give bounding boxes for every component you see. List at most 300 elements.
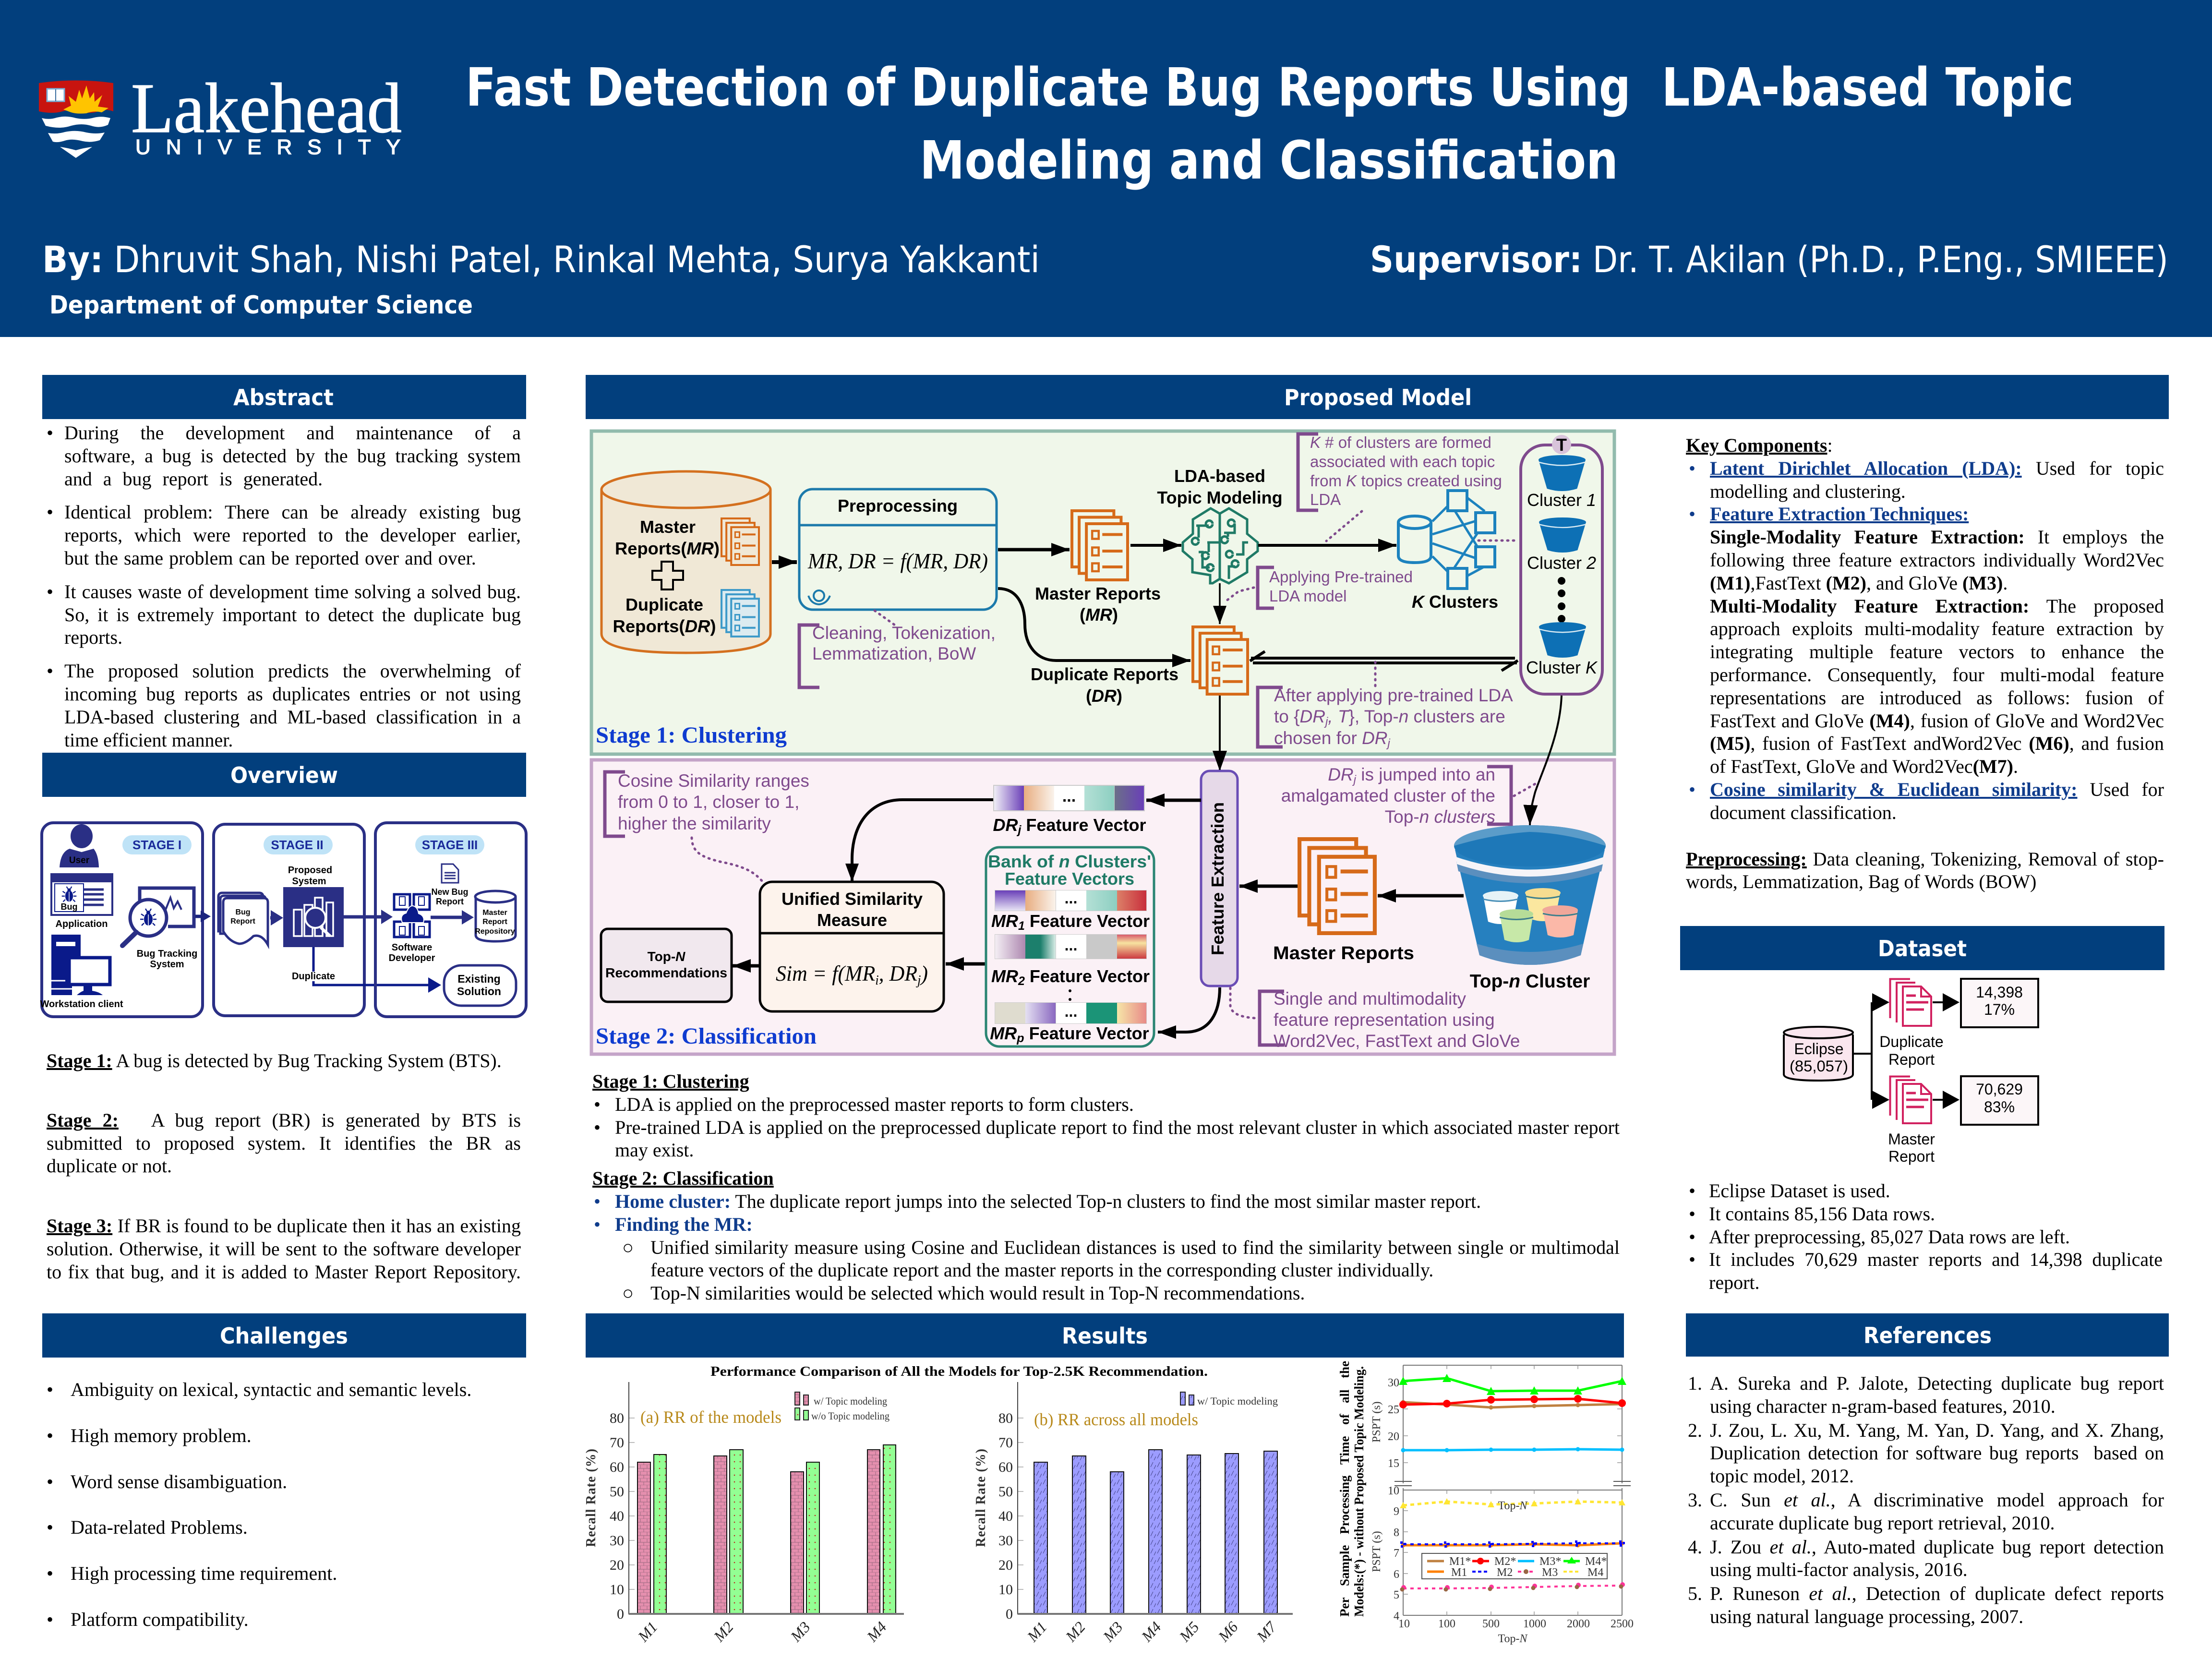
- panel: stage III: STAGE III: [422, 838, 478, 852]
- text: overview stages: duplicate or not.: [47, 1155, 172, 1177]
- existing solution: [444, 965, 516, 1006]
- callout: cosine similarity: [605, 771, 809, 882]
- heading: Overview: [42, 753, 526, 797]
- panel: stage I: Application: [56, 919, 108, 929]
- label: duplicate reports: (DR): [1086, 686, 1122, 706]
- panel: stage III: Report: [436, 897, 464, 906]
- text: abstract: During the development and maintenance of a: [64, 422, 521, 444]
- bar chart: RR across all models: (b) RR across all models: [1034, 1410, 1198, 1429]
- text: challenges list: Data-related Problems.: [71, 1516, 248, 1538]
- line chart: PSPT: 6: [1394, 1568, 1399, 1581]
- bar chart: RR of the models: 0: [617, 1606, 624, 1622]
- text: abstract: incoming bug reports as duplicates entries or not using: [64, 683, 521, 705]
- text: key components: Latent Dirichlet Allocation (LDA): Used for topic: [1710, 457, 2164, 479]
- box: duplicate count: 14,398: [1976, 984, 2023, 1001]
- text: stage descriptions: ○: [622, 1237, 634, 1258]
- text: abstract: The proposed solution predicts the overwhelming of: [64, 660, 521, 682]
- logo: Lakehead University: Lakehead: [131, 69, 402, 148]
- unified similarity measure box: ): [920, 961, 928, 986]
- text: references: 5.: [1688, 1583, 1702, 1604]
- panel: stage II: STAGE II: [271, 838, 324, 852]
- chart caption: per sample processing time: of: [1337, 1413, 1352, 1425]
- bank of cluster feature vectors: Feature Vectors: [1005, 869, 1134, 889]
- top-N recommendations: Top-N: [648, 949, 685, 964]
- label: duplicate report: [1879, 1033, 1944, 1068]
- heading: Challenges: Challenges: [220, 1323, 348, 1349]
- line chart: PSPT: [1370, 1365, 1634, 1645]
- label: master report: Report: [1888, 1148, 1935, 1165]
- icon: application window: [51, 874, 112, 915]
- callout: pre-trained LDA: LDA model: [1269, 587, 1346, 605]
- text: overview stages: submitted to proposed system. It identifies the BR as: [47, 1132, 521, 1154]
- heading: Results: [586, 1313, 1624, 1358]
- bank of clusters: Cluster K: [1526, 658, 1598, 677]
- bank of clusters: Cluster 1: [1527, 490, 1596, 510]
- callout: pre-trained LDA: [1226, 567, 1413, 608]
- text: stage descriptions: feature vectors of the duplicate report and the master reports in the corresponding cluster individually.: [650, 1259, 1433, 1281]
- feature vector: DRj: j: [1016, 823, 1022, 837]
- icon: user: [60, 824, 99, 867]
- text: key components: of FastText, GloVe and Word2Vec(M7).: [1710, 756, 2018, 777]
- heading: Proposed Model: [586, 375, 2169, 419]
- bank of cluster feature vectors: ...: [1065, 890, 1077, 907]
- panel: stage II: Report: [230, 917, 255, 926]
- label: master report: Master: [1888, 1130, 1935, 1148]
- existing solution: Solution: [457, 985, 501, 998]
- text: references: using natural language processing, 2007.: [1710, 1606, 2023, 1627]
- icon: proposed system: [283, 887, 344, 947]
- bar chart: RR across all models: M4: [1138, 1618, 1165, 1645]
- text: challenges list: •: [47, 1425, 53, 1446]
- text: abstract: •: [47, 422, 53, 444]
- panel: stage III: Developer: [389, 953, 435, 963]
- bank of clusters: T: [1556, 435, 1567, 455]
- callout: top-n clusters chosen: }, Top-n clusters are: [1348, 707, 1505, 726]
- callout: K clusters: K # of clusters are formed: [1310, 433, 1491, 451]
- label: duplicate report: Report: [1888, 1051, 1935, 1068]
- line chart: PSPT: 7: [1394, 1547, 1399, 1560]
- database: master and duplicate reports: Reports(MR): [615, 539, 720, 558]
- database: master and duplicate reports: [601, 471, 770, 653]
- line chart: PSPT: Top-N: [1498, 1500, 1528, 1512]
- callout: top-n clusters chosen: j: [1386, 737, 1391, 750]
- bank of clusters: Cluster 2: [1527, 553, 1596, 573]
- callout: K clusters: [1298, 433, 1502, 541]
- callout: feature representation: feature representation using: [1274, 1010, 1495, 1030]
- callout: feature representation: Word2Vec, FastText and GloVe: [1274, 1031, 1520, 1051]
- callout: DRj jumped: [1281, 765, 1535, 827]
- heading: Abstract: [42, 375, 526, 419]
- legend: [795, 1392, 890, 1422]
- dataset diagram: [1784, 979, 2038, 1165]
- text: references: J. Zou, L. Xu, M. Yang, M. Yan, D. Yang, and X. Zhang,: [1710, 1419, 2164, 1441]
- text: stage descriptions: Finding the MR:: [615, 1214, 753, 1235]
- existing solution: Existing: [457, 973, 501, 985]
- label: master reports: (MR): [1080, 605, 1118, 625]
- callout: feature representation: [1230, 988, 1520, 1051]
- label: stage 1: Stage 1: Clustering: [596, 722, 787, 748]
- heading: Dataset: Dataset: [1878, 936, 1967, 962]
- bar chart: RR across all models: 30: [998, 1533, 1013, 1549]
- panel: stage I: System: [150, 959, 184, 970]
- callout: cosine similarity: from 0 to 1, closer to 1,: [618, 792, 799, 812]
- top-N recommendations: Recommendations: [605, 965, 727, 980]
- text: challenges list: Ambiguity on lexical, syntactic and semantic levels.: [71, 1379, 471, 1400]
- department: Department of Computer Science: [49, 291, 473, 320]
- text: stage descriptions: LDA is applied on the preprocessed master reports to form clusters.: [615, 1094, 1134, 1115]
- unified similarity measure box: , DR: [879, 961, 917, 986]
- bank of cluster feature vectors: 1: [1018, 919, 1025, 933]
- bank of cluster feature vectors: MR: [990, 1023, 1017, 1043]
- chart caption: per sample processing time: [1337, 1361, 1366, 1617]
- panel: stage II: Duplicate: [292, 971, 335, 982]
- line chart: PSPT: 2500: [1611, 1618, 1634, 1630]
- panel: stage I: [40, 823, 211, 1017]
- text: abstract: It causes waste of development time solving a solved bug.: [64, 581, 521, 602]
- text: overview stages: [47, 1050, 521, 1283]
- callout: feature representation: Single and multimodality: [1274, 989, 1467, 1009]
- text: dataset facts: report.: [1709, 1272, 1760, 1293]
- line chart: PSPT: 100: [1438, 1618, 1455, 1630]
- label: duplicate report: Duplicate: [1879, 1033, 1944, 1050]
- text: challenges list: Platform compatibility.: [71, 1609, 249, 1630]
- label: duplicate reports: [1031, 664, 1178, 706]
- text: key components: representations are introduced as follows: fusion of: [1710, 687, 2164, 709]
- bank of cluster feature vectors: Bank of n Clusters': [988, 852, 1151, 871]
- text: dataset facts: Eclipse Dataset is used.: [1709, 1180, 1890, 1202]
- bar chart: RR of the models: M4: [863, 1618, 890, 1645]
- text: stage descriptions: Stage 1: Clustering: [592, 1070, 749, 1092]
- database: eclipse: (85,057): [1790, 1058, 1848, 1075]
- panel: stage II: [214, 824, 430, 1016]
- text: challenges list: High memory problem.: [71, 1425, 252, 1446]
- callout: top-n clusters chosen: After applying pre-trained LDA: [1274, 685, 1513, 705]
- unified similarity measure box: [760, 882, 944, 1011]
- text: key components: Multi-Modality Feature Extraction: The proposed: [1710, 595, 2164, 617]
- bank of cluster feature vectors: 2: [1018, 974, 1025, 988]
- panel: stage I: STAGE I: [132, 838, 181, 852]
- header band: [0, 0, 2212, 337]
- bar chart: RR across all models: M1: [1023, 1618, 1050, 1645]
- callout: DRj jumped: Top-n clusters: [1385, 807, 1495, 827]
- text: references: using multi-factor analysis, 2016.: [1710, 1559, 1968, 1580]
- bar chart: RR of the models: 40: [610, 1508, 624, 1524]
- heading: References: References: [1863, 1322, 1992, 1348]
- text: overview stages: solution. Otherwise, it will be sent to the software developer: [47, 1238, 521, 1260]
- text: stage descriptions: Unified similarity measure using Cosine and Euclidean distances is used to find the similarity between single or multimodal: [650, 1237, 1620, 1258]
- line chart: PSPT: PSPT (s): [1370, 1401, 1383, 1443]
- panel: stage II: System: [292, 876, 326, 887]
- text: challenges list: [47, 1379, 471, 1630]
- legend: [1180, 1392, 1278, 1407]
- text: stage descriptions: Pre-trained LDA is applied on the preprocessed duplicate report to find the most relevant cluster in which associated master report: [615, 1117, 1620, 1138]
- legend: w/o Topic modeling: [811, 1410, 890, 1422]
- icon: master report repository: Master: [482, 909, 507, 917]
- icon: duplicate reports stack: [1193, 627, 1248, 694]
- box: duplicate count: 17%: [1984, 1001, 2015, 1018]
- text: key components: Preprocessing: Data cleaning, Tokenizing, Removal of stop-: [1686, 848, 2164, 870]
- text: references: P. Runeson et al., Detection of duplicate defect reports: [1710, 1583, 2164, 1604]
- text: abstract: •: [47, 581, 53, 602]
- line chart: PSPT: 25: [1388, 1404, 1399, 1416]
- bar chart: RR of the models: 60: [610, 1459, 624, 1475]
- callout: K clusters: associated with each topic: [1310, 453, 1495, 470]
- callout: top-n clusters chosen: , T: [1328, 707, 1350, 726]
- icon: master reports: [1072, 511, 1128, 580]
- label: LDA topic modeling: [1157, 466, 1283, 507]
- text: stage descriptions: may exist.: [615, 1139, 694, 1161]
- bar chart: RR across all models: M3: [1099, 1618, 1126, 1645]
- line chart: PSPT: PSPT (s): [1370, 1531, 1383, 1572]
- icon: master reports large: [1299, 839, 1375, 933]
- text: references: topic model, 2012.: [1710, 1465, 1854, 1487]
- box: duplicate count: [1961, 979, 2038, 1027]
- callout: top-n clusters chosen: chosen for DR: [1274, 728, 1388, 748]
- callout: pre-trained LDA: Applying Pre-trained: [1269, 568, 1413, 586]
- unified similarity measure box: Measure: [817, 910, 887, 930]
- text: challenges list: Word sense disambiguation.: [71, 1471, 287, 1492]
- bar chart: RR across all models: 0: [1006, 1606, 1013, 1622]
- text: abstract: reports, which were reported to the developer earlier,: [64, 524, 521, 546]
- heading: Abstract: Abstract: [233, 385, 334, 410]
- text: key components: (M1),FastText (M2), and GloVe (M3).: [1710, 572, 2008, 594]
- top-N recommendations: [601, 929, 732, 1002]
- chart caption: per sample processing time: the: [1337, 1361, 1352, 1378]
- legend: M3: [1542, 1566, 1558, 1579]
- line chart: PSPT: 30: [1388, 1377, 1399, 1389]
- text: key components: integrating multiple feature vectors to enhance the: [1710, 641, 2164, 662]
- unified similarity measure box: j: [916, 973, 921, 988]
- callout: DRj jumped: is jumped into an: [1356, 765, 1495, 784]
- text: references: C. Sun et al., A discriminative model approach for: [1710, 1489, 2164, 1511]
- bank of cluster feature vectors: ...: [1065, 1003, 1077, 1020]
- heading: References: [1686, 1313, 2169, 1357]
- bar chart: RR across all models: 50: [998, 1484, 1013, 1500]
- database: eclipse: [1784, 1027, 1853, 1081]
- text: dataset facts: It includes 70,629 master reports and 14,398 duplicate: [1709, 1249, 2163, 1270]
- text: stage descriptions: •: [594, 1094, 601, 1115]
- legend: M3*: [1539, 1555, 1561, 1568]
- panel: stage I: Bug Tracking: [137, 949, 197, 959]
- text: key components: modelling and clustering.: [1710, 481, 1906, 502]
- preprocessing box: Preprocessing: [838, 496, 958, 516]
- line chart: PSPT: 20: [1388, 1431, 1399, 1443]
- box: master count: [1961, 1076, 2038, 1125]
- line chart: PSPT: 1000: [1523, 1618, 1546, 1630]
- line chart: PSPT: 5: [1394, 1589, 1399, 1601]
- text: key components: FastText and GloVe (M4), fusion of GloVe and Word2Vec: [1710, 710, 2164, 732]
- legend: w/ Topic modeling: [1197, 1395, 1278, 1407]
- feature extraction bar: [1201, 771, 1238, 986]
- preprocessing box: MR, DR = f(MR, DR): [807, 549, 988, 573]
- panel: stage 1 clustering: [591, 431, 1614, 754]
- label: duplicate reports: Duplicate Reports: [1031, 664, 1178, 684]
- text: key components: approach exploits multi-modality feature extraction by: [1710, 618, 2164, 639]
- text: dataset facts: It contains 85,156 Data rows.: [1709, 1203, 1935, 1225]
- icon: K clusters network: [1398, 491, 1495, 589]
- title: [466, 57, 2074, 191]
- text: abstract: time efficient manner.: [64, 729, 233, 751]
- chart caption: per sample processing time: Models:(*) - without Proposed Topic Modeling.: [1352, 1366, 1366, 1617]
- bar chart: RR across all models: 20: [998, 1557, 1013, 1573]
- text: abstract: •: [47, 501, 53, 523]
- callout: cosine similarity: higher the similarity: [618, 814, 771, 833]
- bank of cluster feature vectors: MR: [991, 966, 1018, 986]
- text: references: accurate duplicate bug report retrieval, 2010.: [1710, 1512, 2055, 1534]
- icon: application window: Bug: [60, 902, 78, 912]
- title: Modeling and Classification: [920, 130, 1618, 191]
- icon: workstation: [51, 935, 110, 995]
- bar chart: RR of the models: [584, 1382, 904, 1645]
- legend: M2*: [1494, 1555, 1516, 1568]
- bar chart: RR across all models: M5: [1176, 1618, 1202, 1645]
- icon: software developer: [394, 894, 430, 937]
- chart caption: per sample processing time: Time: [1337, 1436, 1352, 1465]
- text: overview stages: Stage 2: A bug report (BR) is generated by BTS is: [47, 1109, 521, 1131]
- text: stage descriptions: •: [594, 1214, 601, 1235]
- bar chart: RR across all models: M6: [1214, 1618, 1241, 1645]
- panel: stage II: Proposed: [288, 865, 332, 876]
- text: dataset facts: After preprocessing, 85,027 Data rows are left.: [1709, 1226, 2070, 1248]
- text: stage descriptions: Home cluster: The duplicate report jumps into the selected Top-n clusters to find the most similar master report.: [615, 1190, 1481, 1212]
- text: abstract: reports.: [64, 626, 122, 648]
- icon: user: User: [69, 855, 90, 866]
- chart caption: per sample processing time: Sample: [1337, 1545, 1352, 1586]
- callout: preprocessing steps: Cleaning, Tokenization,: [812, 623, 996, 643]
- bar chart: RR of the models: 50: [610, 1484, 624, 1500]
- legend: M4*: [1585, 1555, 1607, 1568]
- bank of cluster feature vectors: ...: [1065, 937, 1077, 954]
- legend: w/ Topic modeling: [814, 1395, 887, 1407]
- bar chart: RR across all models: 70: [998, 1435, 1013, 1451]
- text: key components: [1686, 434, 2164, 892]
- heading: Results: Results: [1062, 1323, 1148, 1349]
- legend: M4: [1587, 1566, 1603, 1579]
- label: LDA topic modeling: LDA-based: [1174, 466, 1265, 486]
- icon: master report repository: Repository: [475, 927, 515, 936]
- icon: top-n cluster bucket: [1454, 825, 1606, 965]
- text: key components: •: [1689, 503, 1695, 525]
- heading: Dataset: [1680, 926, 2164, 970]
- text: references: [1688, 1372, 2164, 1627]
- bar chart: RR across all models: 40: [998, 1508, 1013, 1524]
- bank of clusters: [1521, 435, 1602, 694]
- line chart: PSPT: Top-N: [1498, 1633, 1528, 1645]
- legend: [1422, 1553, 1607, 1579]
- bank of cluster feature vectors: p: [1016, 1032, 1024, 1045]
- callout: top-n clusters chosen: [1258, 685, 1513, 750]
- icon: master report docs: [1890, 1076, 1931, 1123]
- callout: preprocessing steps: Lemmatization, BoW: [812, 644, 976, 663]
- text: challenges list: •: [47, 1516, 53, 1538]
- bar chart: RR of the models: M1: [634, 1618, 661, 1645]
- callout: DRj jumped: j: [1352, 773, 1357, 786]
- text: key components: words, Lemmatization, Bag of Words (BOW): [1686, 871, 2036, 892]
- text: references: A. Sureka and P. Jalote, Detecting duplicate bug report: [1710, 1372, 2164, 1394]
- text: challenges list: •: [47, 1379, 53, 1400]
- text: dataset facts: •: [1689, 1203, 1695, 1225]
- text: overview stages: Stage 3: If BR is found to be duplicate then it has an existing: [47, 1215, 521, 1237]
- box: master count: 70,629: [1976, 1081, 2023, 1098]
- feature vector: DRj: [993, 785, 1146, 837]
- chart caption: per sample processing time: all: [1337, 1389, 1352, 1403]
- bar chart: RR of the models: 30: [610, 1533, 624, 1549]
- text: stage descriptions: Stage 2: Classification: [592, 1167, 774, 1189]
- panel: stage III: New Bug: [431, 887, 469, 897]
- bank of cluster feature vectors: Feature Vector: [1024, 1023, 1149, 1043]
- label: top-n cluster: Top-n Cluster: [1470, 971, 1590, 992]
- text: abstract: So, it is extremely important to detect the duplicate bug: [64, 604, 521, 625]
- overview diagram: [40, 823, 526, 1017]
- bar chart: RR of the models: 70: [610, 1435, 624, 1451]
- text: references: 2.: [1688, 1419, 1702, 1441]
- chart caption: per sample processing time: Per: [1337, 1598, 1352, 1617]
- text: references: 3.: [1688, 1489, 1702, 1511]
- bar chart: RR of the models: M2: [710, 1618, 737, 1645]
- text: references: J. Zou et al., Auto-mated duplicate bug report detection: [1710, 1536, 2164, 1558]
- line chart: PSPT: 8: [1394, 1527, 1399, 1539]
- heading: Overview: Overview: [230, 762, 338, 788]
- icon: brain circuit: [1183, 508, 1258, 583]
- text: abstract: Identical problem: There can be already existing bug: [64, 501, 521, 523]
- chart title: Performance Comparison of All the Models for Top-2.5K Recommendation.: [710, 1364, 1208, 1379]
- text: key components: •: [1689, 779, 1695, 800]
- text: dataset facts: •: [1689, 1226, 1695, 1248]
- icon: master report repository: [475, 891, 516, 941]
- text: challenges list: •: [47, 1609, 53, 1630]
- line chart: PSPT: 9: [1394, 1505, 1399, 1518]
- heading: Proposed Model: Proposed Model: [1284, 385, 1472, 410]
- text: key components: Single-Modality Feature Extraction: It employs the: [1710, 526, 2164, 548]
- unified similarity measure box: i: [875, 973, 879, 988]
- text: key components: Key Components:: [1686, 434, 1833, 456]
- bar chart: RR of the models: (a) RR of the models: [640, 1407, 781, 1427]
- bar chart: RR across all models: [974, 1382, 1293, 1645]
- text: stage descriptions: •: [594, 1190, 601, 1212]
- legend: M2: [1497, 1566, 1513, 1579]
- database: master and duplicate reports: Master: [640, 517, 696, 537]
- label: master reports: [1035, 584, 1161, 625]
- label: master report: [1888, 1130, 1935, 1165]
- text: stage descriptions: ○: [622, 1282, 634, 1304]
- bar chart: RR across all models: M2: [1062, 1618, 1089, 1645]
- panel: stage III: [344, 823, 526, 1017]
- line chart: PSPT: 15: [1388, 1457, 1399, 1470]
- panel: stage II: Bug: [235, 908, 251, 916]
- bar chart: RR of the models: 10: [610, 1582, 624, 1598]
- text: abstract: but the same problem can be reported over and over.: [64, 547, 476, 569]
- text: key components: •: [1689, 457, 1695, 479]
- icon: duplicate report docs: [1890, 979, 1931, 1026]
- line chart: PSPT: 2000: [1567, 1618, 1590, 1630]
- double arrows: [1250, 651, 1518, 671]
- text: dataset facts: •: [1689, 1180, 1695, 1202]
- heading: Challenges: [42, 1313, 526, 1358]
- text: challenges list: •: [47, 1563, 53, 1584]
- supervisor: Supervisor: Dr. T. Akilan (Ph.D., P.Eng., SMIEEE): [1370, 238, 2168, 281]
- panel: stage III: Software: [392, 942, 432, 953]
- text: references: Duplication detection for software bug reports based on: [1710, 1442, 2164, 1464]
- callout: top-n clusters chosen: j: [1324, 715, 1328, 728]
- text: references: 1.: [1688, 1372, 1702, 1394]
- callout: preprocessing steps: [799, 611, 996, 687]
- icon: bug tracking system: [122, 888, 194, 946]
- preprocessing box: [799, 489, 997, 610]
- feature vector: DRj: DR: [993, 815, 1018, 835]
- callout: DRj jumped: DR: [1328, 765, 1354, 784]
- bar chart: RR across all models: 80: [998, 1410, 1013, 1426]
- line chart: PSPT: 10: [1388, 1485, 1399, 1497]
